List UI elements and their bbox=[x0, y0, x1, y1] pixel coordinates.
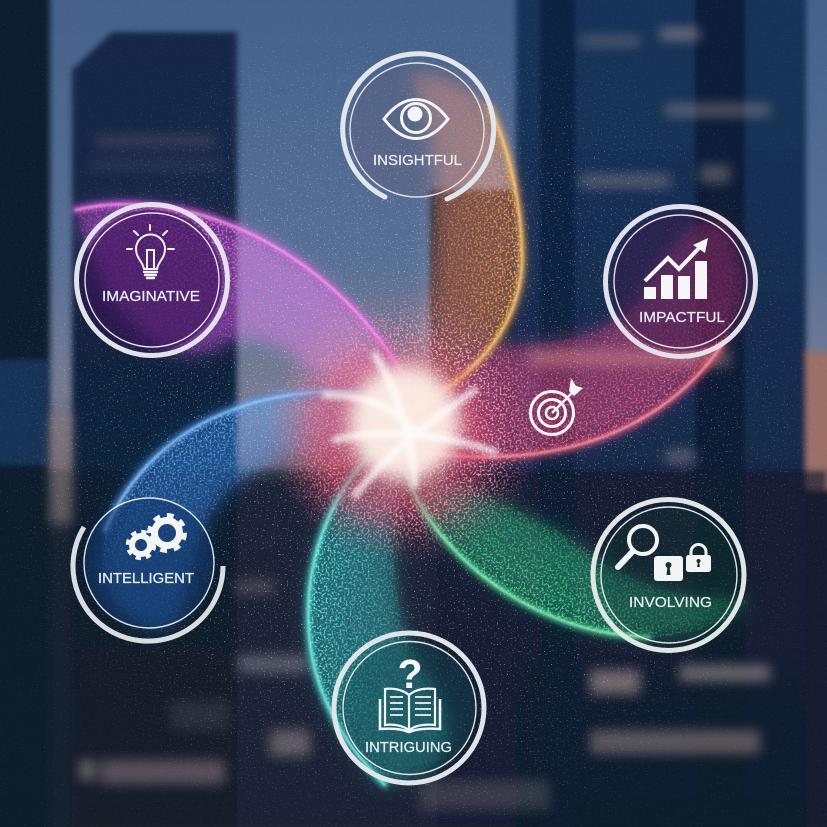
badge: Insightful bbox=[343, 54, 494, 199]
badge: Intelligent bbox=[73, 498, 223, 641]
particle fill of arcs bbox=[75, 75, 750, 785]
icon: open book bbox=[380, 689, 440, 732]
icon: question mark: ? bbox=[397, 651, 423, 697]
soft colour glow of arcs bbox=[75, 75, 750, 785]
glowing outer edges of arcs bbox=[75, 108, 722, 785]
icon: gears bbox=[128, 516, 184, 558]
icon: target with arrow bbox=[530, 378, 583, 434]
swirl: six coloured particle arcs bbox=[75, 75, 750, 785]
label: INSIGHTFUL bbox=[373, 152, 462, 169]
label: INTRIGUING bbox=[365, 739, 452, 756]
badge: Involving bbox=[593, 500, 744, 650]
badge: Intriguing bbox=[334, 633, 484, 783]
icon: eye bbox=[384, 100, 448, 138]
icon: light bulb bbox=[127, 225, 174, 278]
bright core lines of arcs bbox=[75, 108, 722, 785]
label: IMPACTFUL bbox=[639, 309, 725, 326]
label: INTELLIGENT bbox=[98, 570, 194, 587]
icon: rising bar chart bbox=[644, 238, 708, 299]
icon: magnifier and locks bbox=[618, 526, 711, 581]
white-hot centre burst bbox=[300, 350, 495, 520]
badge: Impactful bbox=[606, 206, 756, 356]
label: INVOLVING bbox=[629, 594, 712, 611]
label: IMAGINATIVE bbox=[102, 288, 200, 305]
badge: Imaginative bbox=[76, 204, 228, 356]
